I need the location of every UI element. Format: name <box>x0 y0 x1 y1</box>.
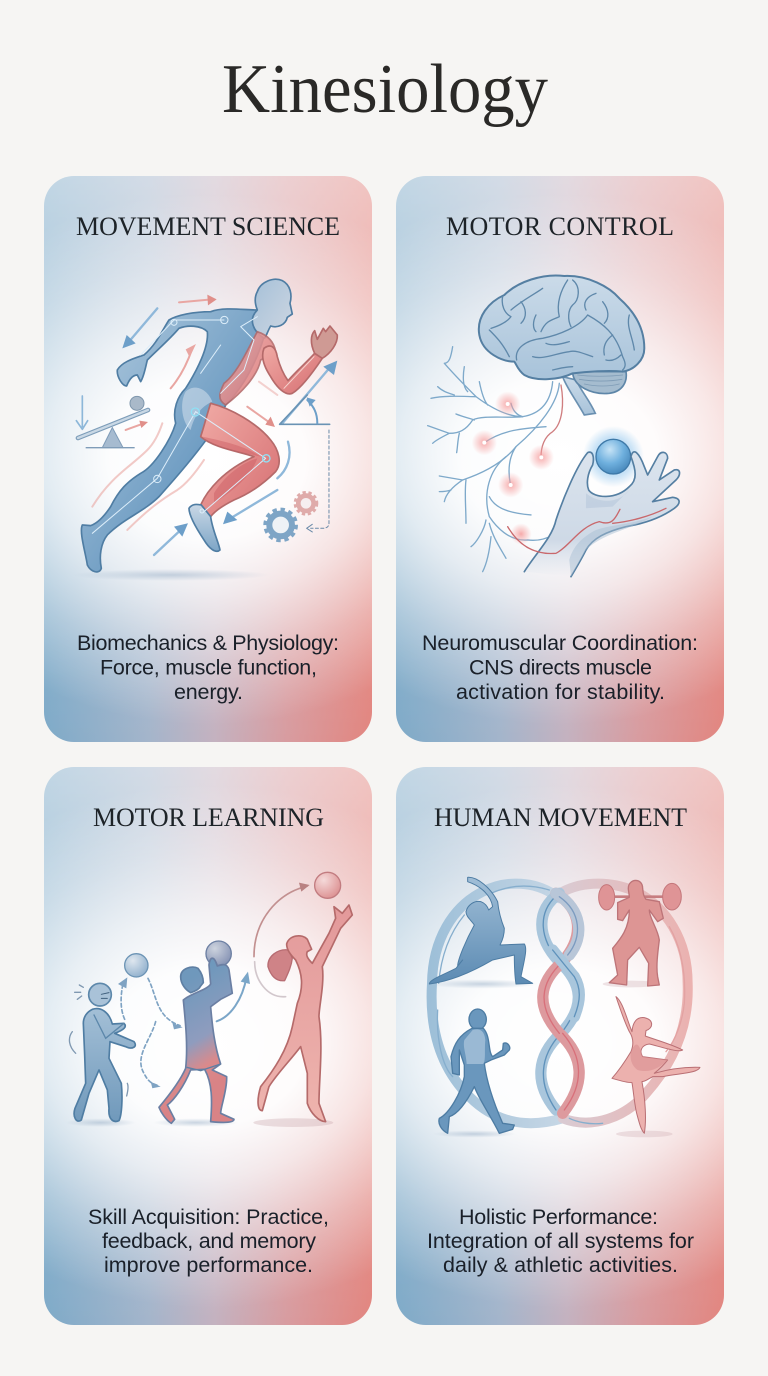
description: feedback, and memory <box>102 1229 316 1253</box>
panel: motor learning <box>44 767 372 1325</box>
foot <box>189 504 220 551</box>
practicing figure <box>159 958 234 1123</box>
lever diagram <box>76 396 148 448</box>
panel: human movement <box>396 767 724 1325</box>
glowing ball <box>583 426 644 487</box>
central helix <box>541 893 579 1113</box>
panel: movement science <box>44 176 372 742</box>
nerve tree <box>428 347 619 572</box>
description: CNS directs muscle <box>469 656 652 680</box>
weightlifter figure <box>599 880 681 986</box>
arrows and trajectories <box>69 883 310 1096</box>
heading: motor control: MOTOR CONTROL <box>446 212 674 241</box>
illustration: brain, nerves and hand <box>428 276 680 577</box>
heading: movement science: MOVEMENT SCIENCE <box>76 212 340 241</box>
brain <box>479 276 644 415</box>
ballet dancer figure <box>612 997 700 1133</box>
hand <box>311 326 337 358</box>
gears <box>265 492 317 540</box>
heading: motor learning: MOTOR LEARNING <box>93 803 324 832</box>
description: energy. <box>174 680 243 704</box>
arrows around the runner <box>92 295 337 555</box>
description: Neuromuscular Coordination: <box>422 631 698 655</box>
runner figure <box>81 279 337 572</box>
description <box>422 631 698 704</box>
yoga figure <box>429 877 533 984</box>
walking figure <box>439 1009 514 1133</box>
description: Biomechanics & Physiology: <box>77 631 339 655</box>
description: activation for stability. <box>456 680 665 704</box>
heading: human movement: HUMAN MOVEMENT <box>434 803 687 832</box>
balls <box>125 872 341 977</box>
beginner figure <box>74 983 135 1121</box>
description: Holistic Performance: <box>459 1205 658 1229</box>
back leg and back arm <box>81 309 264 572</box>
illustration: interwoven rings with four movers <box>428 877 700 1138</box>
description: improve performance. <box>104 1253 313 1277</box>
skilled figure <box>258 905 352 1122</box>
chest muscle <box>220 332 276 405</box>
angle diagram <box>280 395 330 532</box>
description <box>427 1205 694 1277</box>
description <box>77 631 339 704</box>
front leg <box>201 403 279 517</box>
head <box>252 279 292 338</box>
front arm <box>263 346 322 394</box>
description: daily & athletic activities. <box>443 1253 678 1277</box>
hand <box>508 452 680 577</box>
panel: motor control <box>396 176 724 742</box>
illustration: three stages of skill acquisition <box>66 872 352 1127</box>
outer rings <box>432 884 688 1124</box>
joints and bone lines <box>92 316 314 533</box>
description: Force, muscle function, <box>100 656 317 680</box>
pelvis <box>182 388 212 430</box>
title: Kinesiology <box>222 51 548 128</box>
signal glows <box>472 391 631 545</box>
description: Skill Acquisition: Practice, <box>88 1205 329 1229</box>
hamstring shading <box>202 437 261 503</box>
description <box>88 1205 329 1277</box>
illustration: running figure with biomechanics diagrams <box>72 279 337 581</box>
description: Integration of all systems for <box>427 1229 694 1253</box>
